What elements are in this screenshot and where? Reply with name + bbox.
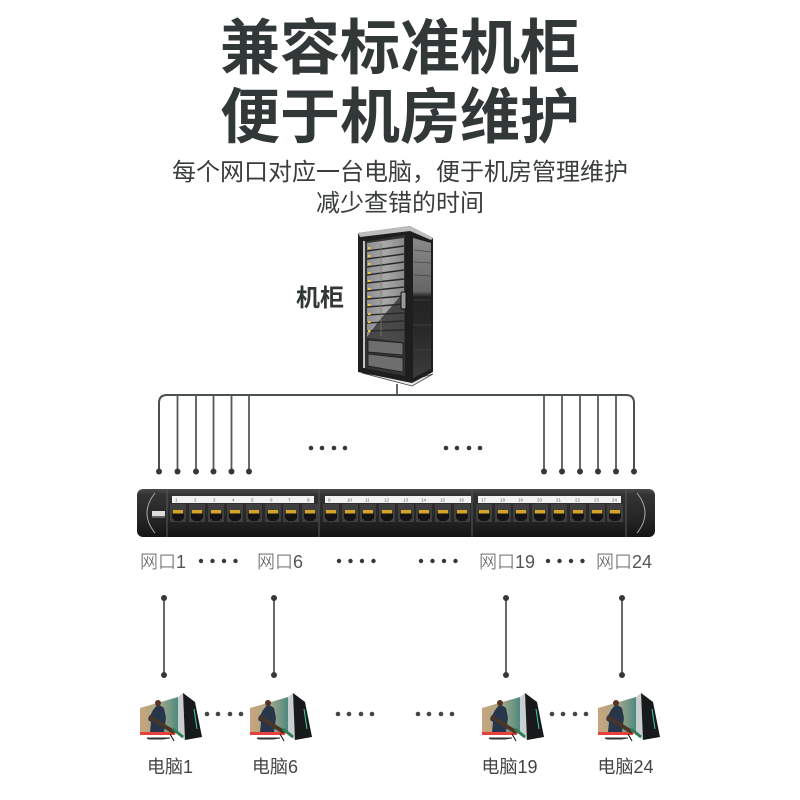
port numbers: 3 (213, 498, 216, 502)
icon: computer 6 (250, 693, 312, 741)
port numbers: 15 (440, 498, 446, 502)
computer labels (147, 757, 654, 777)
port numbers: 8 (307, 498, 310, 502)
ellipsis dots port row (199, 559, 585, 563)
port numbers: 2 (194, 498, 197, 502)
computer labels: 电脑1 (147, 757, 193, 777)
port numbers: 9 (328, 498, 331, 502)
port numbers: 11 (365, 498, 370, 502)
port numbers: 21 (556, 498, 562, 502)
title: 便于机房维护 (220, 84, 580, 151)
ellipsis dots upper (309, 446, 482, 450)
computer labels: 电脑19 (481, 757, 538, 777)
port numbers: 10 (347, 498, 353, 502)
subtitle text: 减少查错的时间 (316, 190, 484, 217)
port numbers: 16 (459, 498, 465, 502)
port numbers: 12 (384, 498, 390, 502)
computer labels: 电脑24 (597, 757, 654, 777)
label strips (172, 496, 621, 503)
wire end dots (156, 468, 637, 474)
port numbers: 14 (421, 498, 427, 502)
port numbers: 24 (612, 498, 618, 502)
connectors: ports to computers (161, 595, 625, 678)
subtitle text (172, 159, 628, 217)
icon: computer 19 (482, 693, 544, 741)
port numbers: 17 (481, 498, 487, 502)
port numbers: 22 (575, 498, 581, 502)
icon: computer 24 (598, 693, 660, 741)
ports (170, 504, 623, 522)
icon: server cabinet (358, 226, 433, 386)
port numbers: 4 (232, 498, 235, 502)
patch panel (137, 489, 655, 537)
port numbers: 23 (594, 498, 600, 502)
title (220, 15, 580, 151)
port numbers: 5 (251, 498, 254, 502)
port numbers (175, 498, 618, 502)
port numbers: 7 (288, 498, 291, 502)
brand mark (152, 511, 165, 518)
icon: computer 1 (140, 693, 202, 741)
ellipsis dots computer row (205, 712, 588, 716)
cabinet base plate (362, 373, 433, 386)
wiring: cabinet to panel (156, 384, 637, 474)
port numbers: 1 (175, 498, 178, 502)
cabinet label: 机柜 (296, 285, 344, 312)
title: 兼容标准机柜 (220, 15, 580, 82)
computer labels: 电脑6 (252, 757, 298, 777)
port labels (140, 552, 652, 572)
port labels: 网口24 (596, 552, 652, 572)
port labels: 网口6 (257, 552, 303, 572)
port numbers: 18 (500, 498, 506, 502)
port labels: 网口19 (479, 552, 535, 572)
port numbers: 19 (518, 498, 524, 502)
port numbers: 13 (403, 498, 409, 502)
port labels: 网口1 (140, 552, 186, 572)
port numbers: 6 (270, 498, 273, 502)
subtitle text: 每个网口对应一台电脑，便于机房管理维护 (172, 159, 628, 186)
port numbers: 20 (537, 498, 543, 502)
